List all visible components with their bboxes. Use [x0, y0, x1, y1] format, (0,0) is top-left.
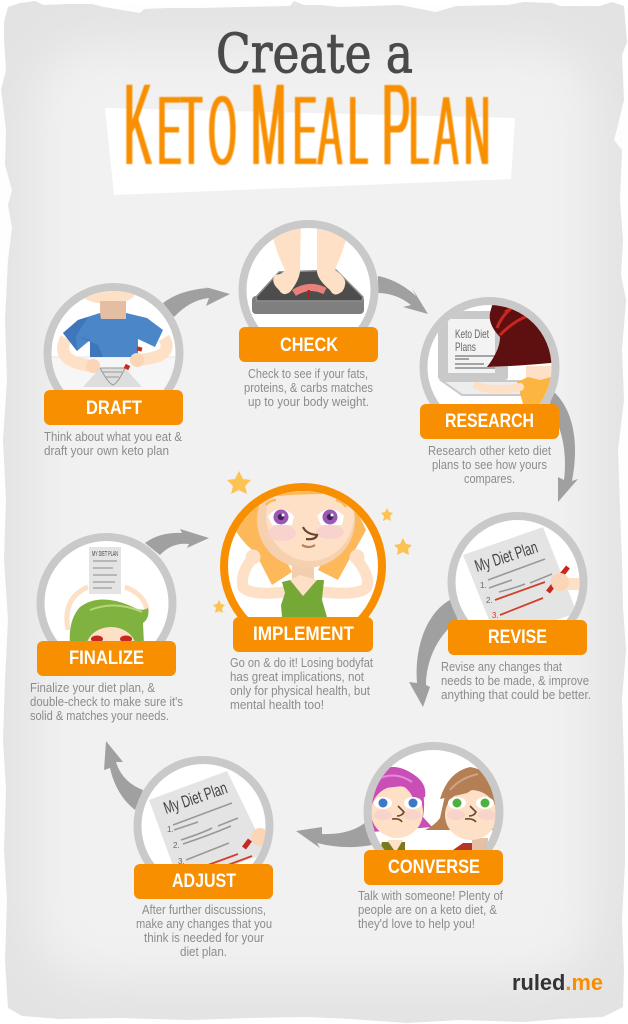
- text: finalize description: double-check to make sure it's: [30, 695, 183, 709]
- icon: adjusting diet plan: 2.: [173, 841, 180, 850]
- label: converse: CONVERSE: [388, 857, 480, 878]
- text: finalize description: [30, 681, 183, 723]
- label: draft: DRAFT: [86, 398, 142, 419]
- icon: revising diet plan: My Diet Plan: [472, 538, 540, 576]
- text: draft description: [44, 430, 183, 458]
- icon: adjusting diet plan: [134, 756, 274, 864]
- arrow: draft to check: [163, 286, 230, 317]
- text: draft description: Think about what you eat &: [44, 430, 183, 444]
- text: converse description: Talk with someone! Plenty of: [358, 889, 503, 903]
- label: check: CHECK: [280, 335, 338, 356]
- arrow: finalize to implement: [145, 529, 209, 555]
- arrow: converse to adjust: [296, 822, 372, 848]
- logo: ruled.me: ruled.me: [512, 970, 603, 995]
- text: implement description: mental health too!: [230, 698, 324, 712]
- text: implement description: only for physical health, but: [230, 684, 370, 698]
- text: converse description: people are on a keto diet, &: [358, 903, 498, 917]
- text: converse description: they'd love to help you!: [358, 917, 475, 931]
- text: converse description: [358, 889, 503, 931]
- label: converse: [364, 850, 503, 885]
- text: research description: [428, 444, 551, 486]
- icon: adjusting diet plan: 3.: [178, 857, 185, 866]
- text: revise description: needs to be made, & improve: [441, 674, 589, 688]
- icon: revising diet plan: 1.: [480, 581, 487, 590]
- step: adjust: [134, 760, 273, 959]
- icon: woman flexing: [220, 483, 386, 618]
- icon: revising diet plan: 2.: [486, 596, 493, 605]
- step: revise: [441, 516, 591, 702]
- label: revise: [448, 620, 587, 655]
- text: adjust description: [136, 903, 272, 959]
- title banner: Keto Meal Plan: K: [124, 59, 152, 190]
- text: research description: Research other keto diet: [428, 444, 551, 458]
- text: adjust description: think is needed for your: [144, 931, 264, 945]
- text: revise description: anything that could be better.: [441, 688, 591, 702]
- arrow: check to research: [378, 276, 428, 314]
- label: check: [239, 327, 378, 362]
- text: adjust description: diet plan.: [180, 945, 227, 959]
- text: draft description: draft your own keto plan: [44, 444, 169, 458]
- label: research: RESEARCH: [445, 411, 534, 432]
- title banner: Keto Meal Plan: EAL: [293, 75, 368, 186]
- label: research: [420, 404, 559, 439]
- text: check description: proteins, & carbs matches: [244, 381, 373, 395]
- arrow: revise to converse: [409, 600, 458, 707]
- text: implement description: has great implications, not: [230, 670, 364, 684]
- text: finalize description: Finalize your diet plan, &: [30, 681, 156, 695]
- icon: person holding up plan: [36, 533, 176, 641]
- title banner: Keto Meal Plan: LAN: [409, 75, 490, 186]
- step: implement: [213, 469, 412, 712]
- title banner: Keto Meal Plan: ETO: [157, 75, 236, 186]
- label: adjust: [134, 864, 273, 899]
- label: draft: [44, 390, 183, 425]
- text: adjust description: After further discussions,: [142, 903, 266, 917]
- title banner: Keto Meal Plan: [105, 59, 515, 195]
- label: revise: REVISE: [488, 627, 547, 648]
- icon: feet on bathroom scale: [238, 220, 378, 327]
- text: research description: plans to see how yours: [432, 458, 547, 472]
- text: check description: Check to see if your fats,: [248, 367, 368, 381]
- text: revise description: Revise any changes that: [441, 660, 562, 674]
- arrow: adjust to finalize: [104, 741, 143, 810]
- text: revise description: [441, 660, 591, 702]
- icon: person researching on laptop: [420, 297, 560, 404]
- icon: adjusting diet plan: 1.: [167, 825, 174, 834]
- step: check: [239, 222, 378, 409]
- text: check description: [244, 367, 373, 409]
- icon: revising diet plan: [448, 512, 588, 620]
- title banner: Keto Meal Plan: P: [382, 59, 410, 190]
- icon: stars: [213, 471, 412, 613]
- text: check description: up to your body weight.: [248, 395, 369, 409]
- text: finalize description: solid & matches your needs.: [30, 709, 169, 723]
- text: research description: compares.: [464, 472, 515, 486]
- arrow: research to revise: [548, 391, 578, 502]
- icon: person researching on laptop: Keto Diet: [455, 327, 489, 341]
- icon: adjusting diet plan: My Diet Plan: [161, 778, 230, 818]
- icon: person holding up plan: MY DIET PLAN: [92, 551, 118, 558]
- title banner: Keto Meal Plan: M: [251, 59, 286, 190]
- label: implement: IMPLEMENT: [253, 624, 354, 645]
- text: implement description: [230, 656, 373, 712]
- label: finalize: [37, 641, 176, 676]
- title: Create a: Create a: [216, 22, 413, 85]
- label: adjust: ADJUST: [172, 871, 236, 892]
- step: converse: [358, 746, 503, 931]
- step: draft: [44, 282, 185, 458]
- text: implement description: Go on & do it! Losing bodyfat: [230, 656, 373, 670]
- text: adjust description: make any changes that you: [136, 917, 272, 931]
- label: implement: [233, 617, 373, 652]
- icon: revising diet plan: 3.: [492, 611, 499, 620]
- step: finalize: [30, 537, 183, 723]
- icon: person researching on laptop: Plans: [455, 340, 476, 354]
- icon: two women talking: [364, 742, 504, 850]
- step: research: [420, 301, 560, 486]
- icon: person drafting plan: [44, 283, 184, 390]
- label: finalize: FINALIZE: [69, 648, 144, 669]
